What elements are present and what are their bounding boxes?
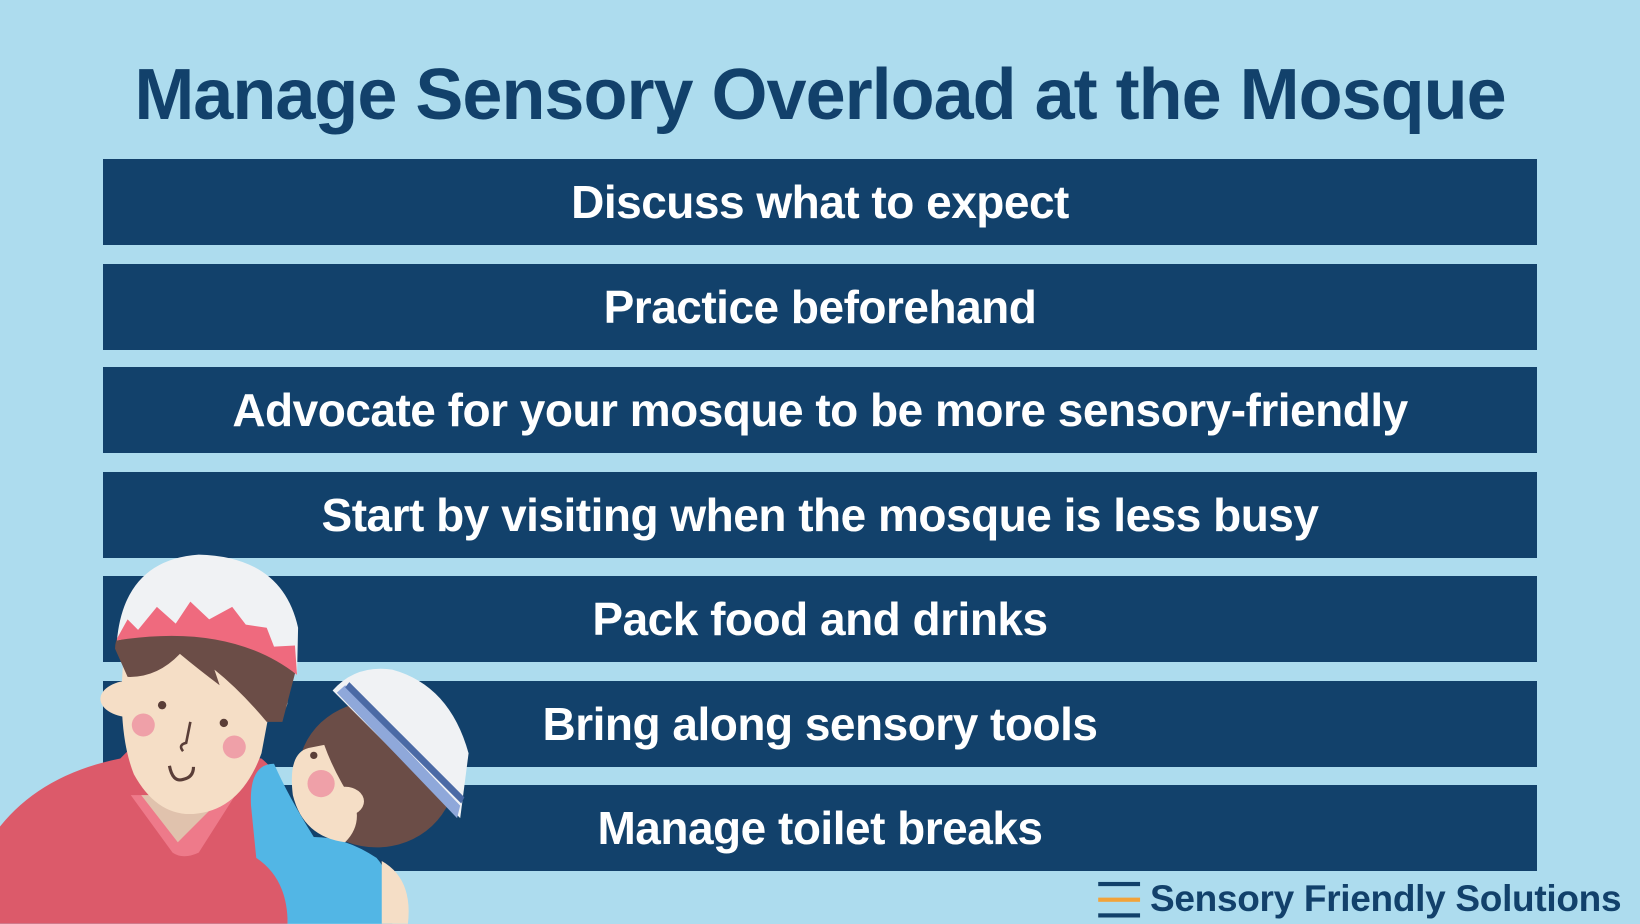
bar: practice: Practice beforehand xyxy=(604,281,1036,333)
bar: toilet breaks xyxy=(103,785,1537,871)
son head xyxy=(298,701,455,847)
bar: advocate xyxy=(103,367,1537,453)
title: Manage Sensory Overload at the Mosque xyxy=(134,55,1506,135)
son hand on father xyxy=(382,861,409,924)
father face xyxy=(100,680,167,718)
bar: start visiting: Start by visiting when the mosque is less busy xyxy=(322,489,1318,541)
bar: sensory tools: Bring along sensory tools xyxy=(543,698,1097,750)
bar: pack food: Pack food and drinks xyxy=(592,593,1048,645)
bar: discuss xyxy=(103,159,1537,245)
father features xyxy=(158,701,166,709)
father cap xyxy=(117,555,298,675)
bar: toilet breaks: Manage toilet breaks xyxy=(597,802,1043,854)
bar: pack food xyxy=(103,576,1537,662)
bar: advocate: Advocate for your mosque to be more sensory-friendly xyxy=(232,384,1408,436)
bar: sensory tools xyxy=(103,681,1537,767)
father hair xyxy=(115,612,296,722)
bar: practice xyxy=(103,264,1537,350)
bar: start visiting xyxy=(103,472,1537,558)
bar: discuss: Discuss what to expect xyxy=(571,176,1069,228)
father shirt xyxy=(0,748,288,924)
son cap xyxy=(333,669,469,818)
son body xyxy=(251,764,393,924)
logo text: Sensory Friendly Solutions xyxy=(1150,878,1621,919)
logo icon xyxy=(1098,882,1140,917)
